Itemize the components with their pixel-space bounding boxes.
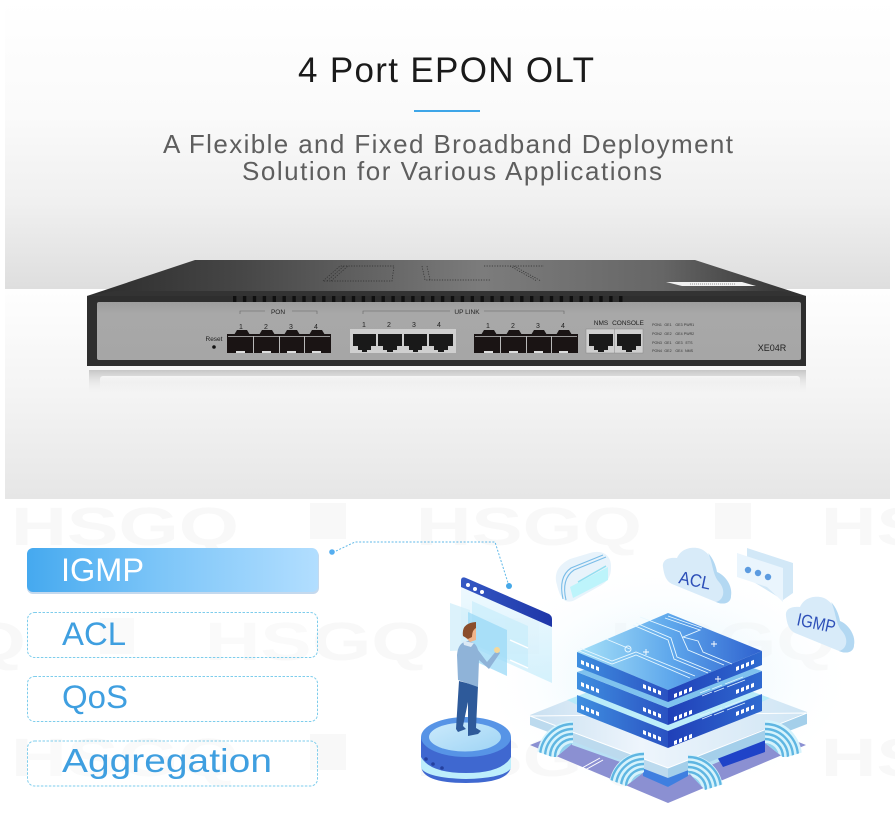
status LED labels: GE1: [664, 323, 672, 327]
status LED labels: PON3: [652, 341, 662, 345]
status LED labels: GE2: [664, 332, 672, 336]
cable fan: front right: [688, 755, 723, 790]
PON SFP ports: [227, 324, 331, 353]
icon: round pedestal: [421, 717, 511, 783]
feature: QoS: [28, 676, 318, 722]
device vents: [233, 296, 625, 302]
feature: ACL: [28, 612, 318, 658]
cable fan: front centre: [609, 752, 644, 787]
illustration: network server scene: [421, 548, 858, 803]
status LED labels: [652, 323, 694, 353]
uplink RJ45 ports: [350, 322, 456, 353]
device: 4 port EPON OLT: [87, 260, 806, 394]
UP LINK label: [363, 309, 564, 316]
uplink RJ45 ports: 4: [437, 322, 441, 329]
feature: Aggregation: Aggregation: [62, 742, 272, 779]
cable fan: front left: [537, 721, 573, 757]
reset button: Reset: [206, 336, 223, 343]
platform base: [530, 660, 807, 803]
PON SFP ports: 3: [289, 324, 293, 331]
icon: ACL cloud: [663, 548, 731, 604]
feature: IGMP (active): IGMP: [61, 552, 144, 588]
uplink SFP ports: 3: [536, 323, 540, 330]
icon: browser window: [450, 577, 552, 683]
icon: IGMP cloud: IGMP: [795, 609, 837, 637]
icon: speech bubble: [737, 548, 793, 602]
status LED labels: GE3: [675, 341, 683, 345]
reset button: [206, 336, 223, 349]
shadow plate: [530, 690, 806, 803]
uplink SFP ports: 2: [511, 323, 515, 330]
uplink SFP ports: [474, 323, 578, 353]
subtitle: [163, 129, 734, 186]
NMS and CONSOLE ports: CONSOLE: [612, 320, 645, 327]
subtitle: A Flexible and Fixed Broadband Deployment: [163, 129, 734, 159]
device front: [87, 296, 806, 366]
server stack: [577, 613, 762, 748]
server layer 3: [577, 694, 762, 748]
background: HSGQ watermarks: [0, 497, 895, 788]
status LED labels: GE2: [664, 349, 672, 353]
NMS and CONSOLE ports: NMS: [594, 320, 609, 327]
status LED labels: GE3: [675, 323, 683, 327]
uplink SFP ports: 4: [561, 323, 565, 330]
status LED labels: PWR1: [684, 323, 694, 327]
status LED labels: NMS: [685, 349, 694, 353]
server layer 1: [577, 613, 762, 702]
feature: QoS: QoS: [62, 679, 128, 715]
feature: IGMP (active): [27, 548, 319, 594]
uplink RJ45 ports: 3: [412, 322, 416, 329]
status LED labels: PON1: [652, 323, 662, 327]
PON SFP ports: 4: [314, 324, 318, 331]
icon: IGMP cloud: [786, 597, 854, 653]
title: 4 Port EPON OLT: [298, 51, 594, 90]
background: HSGQ watermarks: HSGQ: [416, 728, 642, 788]
status LED labels: GE4: [675, 332, 683, 336]
icon: person: [456, 622, 500, 736]
PON SFP ports: 1: [239, 324, 243, 331]
PON label: PON: [271, 309, 285, 316]
device reflection: [89, 370, 806, 394]
background: HSGQ watermarks: HSGQ: [205, 612, 431, 672]
platform top: [530, 660, 807, 768]
uplink RJ45 ports: 2: [387, 322, 391, 329]
server layer 2: [577, 667, 762, 725]
UP LINK label: UP LINK: [454, 309, 480, 316]
platform sides: [530, 715, 668, 778]
status LED labels: GE1: [664, 341, 672, 345]
model label: XE04R: [758, 343, 787, 353]
status LED labels: PWR2: [684, 332, 694, 336]
status LED labels: PON2: [652, 332, 662, 336]
platform cable arcs: [537, 720, 802, 790]
PON label: [240, 309, 317, 316]
title underline: [414, 110, 480, 112]
background: HSGQ watermarks: HSGQ: [11, 728, 239, 788]
background: product section: [5, 0, 890, 499]
connector line: [329, 542, 512, 589]
background: HSGQ watermarks: HSGQ: [11, 497, 239, 557]
server indicator lights: [581, 660, 754, 745]
icon: capsule device: [556, 552, 611, 602]
status LED labels: ETS: [686, 341, 693, 345]
icon: ACL cloud: ACL: [677, 567, 713, 594]
circuit traces: [577, 616, 732, 678]
under structure: [572, 730, 765, 787]
uplink SFP ports: 1: [486, 323, 490, 330]
feature: ACL: ACL: [62, 616, 126, 652]
scene glow: [478, 560, 858, 800]
background: HSGQ watermarks: HSGQ: [416, 497, 642, 557]
status LED labels: PON4: [652, 349, 662, 353]
PON SFP ports: 2: [264, 324, 268, 331]
NMS and CONSOLE ports: [586, 320, 645, 353]
background: HSGQ watermarks: HSGQ: [610, 612, 836, 672]
status LED labels: GE4: [675, 349, 683, 353]
device top cover: [87, 260, 806, 296]
subtitle: Solution for Various Applications: [242, 156, 662, 186]
feature: Aggregation: [28, 741, 318, 786]
front panel: [97, 302, 801, 360]
cable fan: back right: [765, 720, 802, 757]
uplink RJ45 ports: 1: [362, 322, 366, 329]
feature list: [27, 548, 319, 786]
